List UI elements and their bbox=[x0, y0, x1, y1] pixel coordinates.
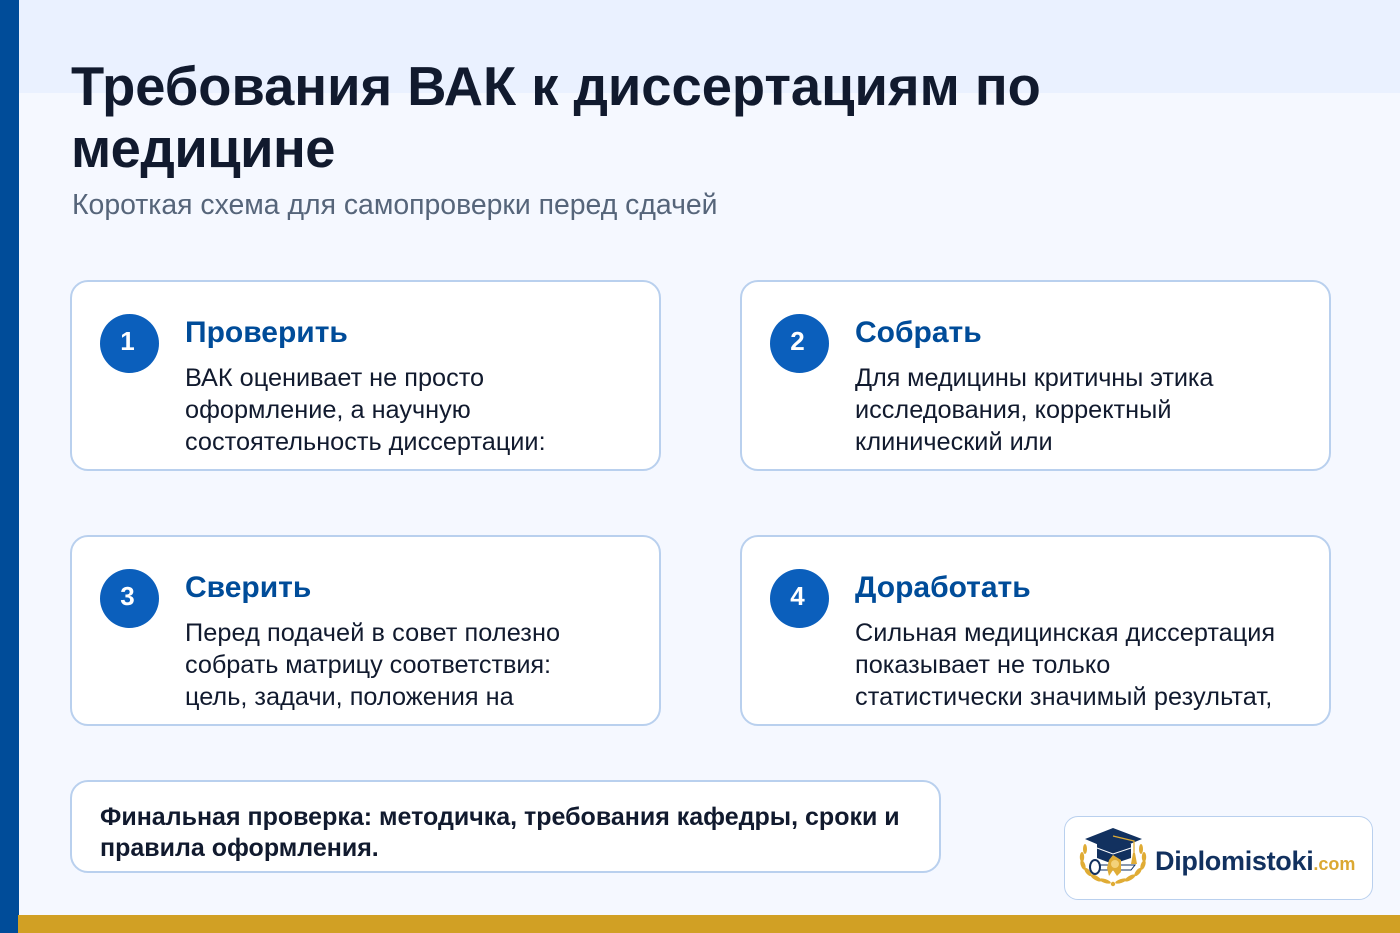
panel: step 2 bbox=[740, 280, 1331, 471]
step 3 text: Перед подачей в совет полезно bbox=[185, 619, 560, 647]
step 4 text: статистически значимый результат, bbox=[855, 683, 1272, 711]
step 1 number bbox=[100, 314, 159, 373]
final check text: Финальная проверка: методичка, требования кафедры, сроки и bbox=[100, 803, 900, 831]
final check text bbox=[100, 803, 900, 862]
step 3 text: цель, задачи, положения на bbox=[185, 683, 514, 711]
header band bbox=[18, 0, 1400, 93]
panel: step 3 bbox=[70, 535, 661, 726]
panel: logo bbox=[1064, 816, 1373, 900]
step 3 heading: Сверить bbox=[185, 571, 311, 604]
bottom accent bar bbox=[18, 915, 1400, 933]
step 3 text bbox=[185, 619, 560, 711]
step 1 heading: Проверить bbox=[185, 316, 348, 349]
title bbox=[71, 56, 1041, 179]
step 2 text: исследования, корректный bbox=[855, 396, 1171, 424]
step 4 text: показывает не только bbox=[855, 651, 1110, 679]
step 3 number: 3 bbox=[120, 581, 135, 611]
step 3 number bbox=[100, 569, 159, 628]
step 4 text: Сильная медицинская диссертация bbox=[855, 619, 1275, 647]
step 4 number: 4 bbox=[790, 581, 805, 611]
icon: graduation cap with laurel bbox=[1080, 828, 1146, 886]
step 2 text bbox=[855, 364, 1214, 456]
step 2 heading: Собрать bbox=[855, 316, 982, 349]
step 1 text: ВАК оценивает не просто bbox=[185, 364, 484, 392]
logo wordmark: Diplomistoki.com bbox=[1155, 846, 1355, 876]
step 4 number bbox=[770, 569, 829, 628]
step 4 text bbox=[855, 619, 1275, 711]
step 4 heading: Доработать bbox=[855, 571, 1031, 604]
left accent bar bbox=[0, 0, 19, 933]
step 2 number: 2 bbox=[790, 326, 805, 356]
step 2 text: клинический или bbox=[855, 428, 1053, 456]
step 3 text: собрать матрицу соответствия: bbox=[185, 651, 551, 679]
step 1 text: состоятельность диссертации: bbox=[185, 428, 546, 456]
step 1 text bbox=[185, 364, 546, 456]
step 2 number bbox=[770, 314, 829, 373]
panel: step 4 bbox=[740, 535, 1331, 726]
panel: step 1 bbox=[70, 280, 661, 471]
step 2 text: Для медицины критичны этика bbox=[855, 364, 1213, 392]
final check text: правила оформления. bbox=[100, 834, 379, 862]
subtitle: Короткая схема для самопроверки перед сдачей bbox=[72, 189, 718, 221]
title: Требования ВАК к диссертациям по bbox=[71, 56, 1041, 117]
step 1 text: оформление, а научную bbox=[185, 396, 471, 424]
step 1 number: 1 bbox=[120, 326, 135, 356]
title: медицине bbox=[71, 118, 335, 179]
panel: final check bbox=[70, 780, 941, 873]
